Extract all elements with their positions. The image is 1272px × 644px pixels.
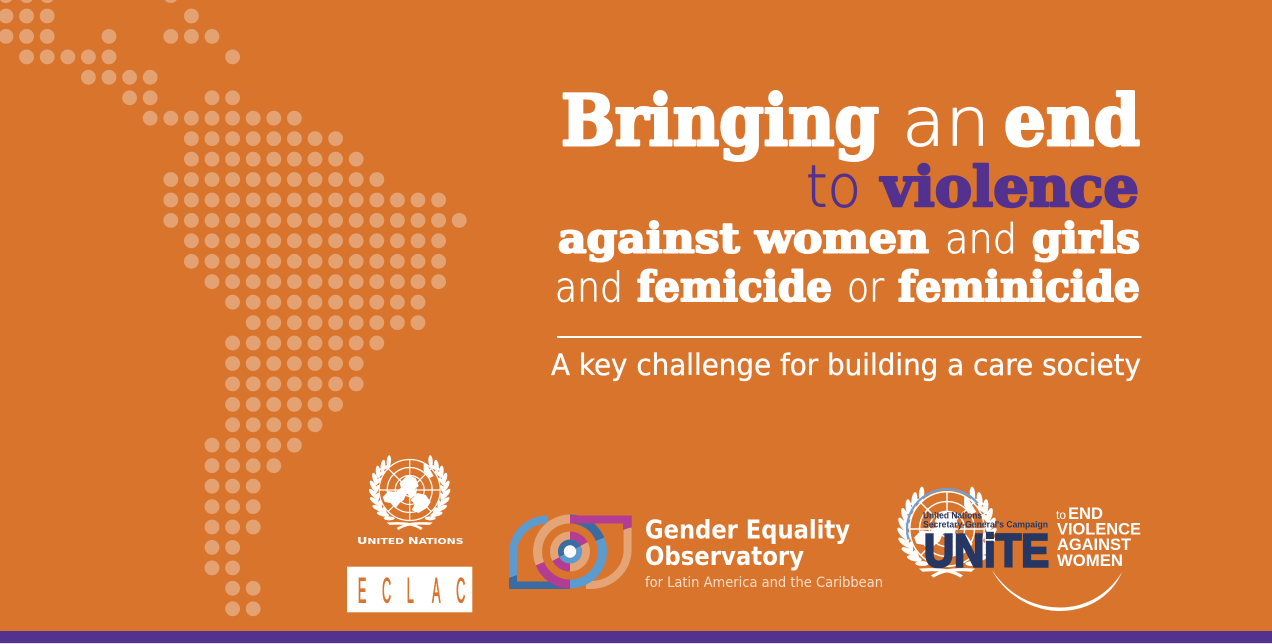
UNiTE wordmark: Secretary-General's Campaign: [923, 520, 1048, 530]
title line 3: girls: [1032, 214, 1140, 262]
observatory name: for Latin America and the Caribbean: [645, 575, 883, 591]
campaign slogan: to: [1056, 508, 1066, 522]
United Nations wordmark: U NITED N ATIONS: [357, 536, 464, 547]
UNiTE wordmark: UNiTE: [924, 524, 1049, 576]
observatory name: Observatory: [645, 542, 804, 572]
title line 1: end: [1004, 79, 1140, 162]
title line 3: and: [945, 215, 1017, 263]
subtitle: A key challenge for building a care society: [551, 348, 1141, 382]
title line 4: or: [847, 264, 884, 312]
icon: UN emblem with blue arc: [896, 486, 998, 578]
observatory name: Gender Equality: [645, 516, 850, 546]
title line 2: violence: [880, 154, 1139, 219]
campaign slogan: END: [1068, 505, 1103, 523]
campaign slogan: VIOLENCE: [1057, 520, 1141, 538]
icon: concentric eye mark: [509, 516, 632, 589]
logo: Gender Equality Observatory: [509, 516, 883, 591]
logo: United Nations and ECLAC: [347, 455, 472, 612]
campaign slogan: WOMEN: [1057, 552, 1123, 570]
title line 4: [555, 263, 1140, 312]
title line 4: femicide: [637, 263, 832, 311]
title line 1: Bringing: [561, 79, 879, 162]
title line 2: to: [806, 152, 861, 220]
bottom purple bar: [0, 631, 1272, 644]
title: [555, 79, 1140, 312]
title line 3: [558, 214, 1140, 263]
logo: UNiTE campaign: [896, 486, 1141, 611]
campaign slogan: AGAINST: [1057, 536, 1131, 554]
icon: United Nations emblem: [368, 455, 452, 530]
campaign slogan: [1056, 505, 1141, 570]
title line 3: against women: [558, 214, 929, 262]
title line 1: [561, 79, 1140, 162]
title line 4: and: [555, 264, 623, 312]
title line 4: feminicide: [898, 263, 1140, 311]
observatory name: [645, 516, 883, 591]
title line 1: an: [902, 84, 990, 162]
UNiTE wordmark: United Nations: [923, 510, 982, 522]
ECLAC badge: ECLAC: [358, 571, 465, 611]
icon: white swoosh: [992, 570, 1122, 611]
dotted map of Latin America: [6, 0, 460, 609]
